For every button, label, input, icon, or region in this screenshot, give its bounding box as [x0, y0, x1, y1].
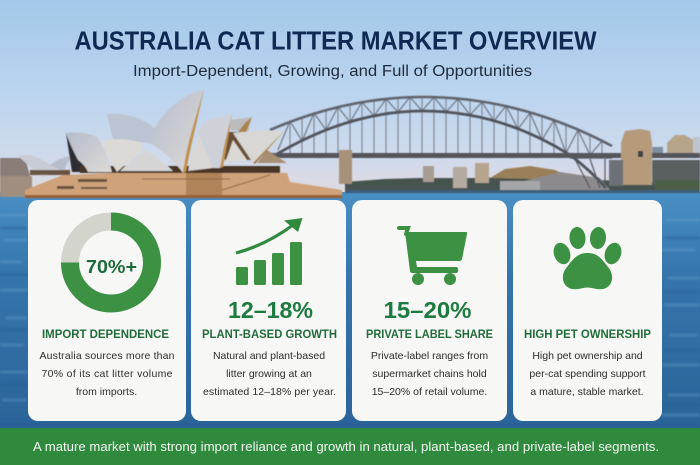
panel: import dependence — [28, 200, 186, 421]
left pylon — [339, 150, 352, 184]
footer banner — [0, 428, 700, 465]
description: 15–20% of retail volume. — [372, 386, 487, 398]
bridge truss — [278, 97, 602, 155]
distant buildings — [0, 158, 30, 176]
heading: HIGH PET OWNERSHIP — [524, 329, 651, 341]
shell group rear — [66, 132, 112, 172]
background: harbour water — [0, 192, 700, 432]
right shells — [188, 133, 213, 171]
shell dark interiors — [30, 170, 70, 175]
skyline: city shore and buildings — [345, 135, 700, 193]
bridge deck — [270, 153, 700, 158]
statistic: 15–20% — [384, 297, 472, 323]
description: High pet ownership and — [532, 350, 643, 362]
description: Australia sources more than — [40, 350, 175, 362]
description: per-cat spending support — [529, 368, 646, 380]
main large shell — [150, 89, 204, 173]
icon: Sydney Harbour Bridge — [270, 97, 700, 188]
panel: private label share — [352, 200, 507, 421]
description: estimated 12–18% per year. — [203, 386, 336, 398]
bridge upper chord — [270, 97, 612, 146]
heading: PRIVATE LABEL SHARE — [366, 329, 493, 341]
description: 70% of its cat litter volume — [42, 368, 173, 380]
icon: shopping cart — [399, 228, 467, 285]
opera house base — [25, 173, 342, 197]
donut chart: 70%+: 70%+ — [86, 256, 137, 277]
panel: high pet ownership — [513, 200, 662, 421]
statistic: 12–18% — [228, 297, 313, 323]
small left shells — [18, 155, 60, 177]
description: litter growing at an — [226, 368, 312, 380]
right pylon — [621, 129, 652, 185]
description: a mature, stable market. — [530, 386, 644, 398]
icon: rising bar chart with arrow — [236, 218, 302, 285]
donut chart: 70%+ — [70, 222, 152, 304]
heading: PLANT-BASED GROWTH — [202, 329, 337, 341]
icon: paw print — [551, 226, 624, 289]
bridge lower truss — [570, 158, 612, 188]
description: from imports. — [76, 386, 137, 398]
background: sky — [0, 0, 700, 195]
title: AUSTRALIA CAT LITTER MARKET OVERVIEW — [74, 26, 597, 56]
bridge lower chord — [277, 111, 606, 188]
bridge hangers — [290, 97, 602, 155]
footer banner: A mature market with strong import reliance and growth in natural, plant-based, and private-label segments. — [33, 439, 659, 454]
subtitle: Import-Dependent, Growing, and Full of Opportunities — [133, 63, 532, 80]
heading: IMPORT DEPENDENCE — [42, 329, 169, 341]
icon: Sydney Opera House — [0, 89, 342, 198]
description: Natural and plant-based — [213, 350, 325, 362]
description: supermarket chains hold — [372, 368, 487, 380]
panel: plant-based growth — [191, 200, 346, 421]
description: Private-label ranges from — [371, 350, 488, 362]
